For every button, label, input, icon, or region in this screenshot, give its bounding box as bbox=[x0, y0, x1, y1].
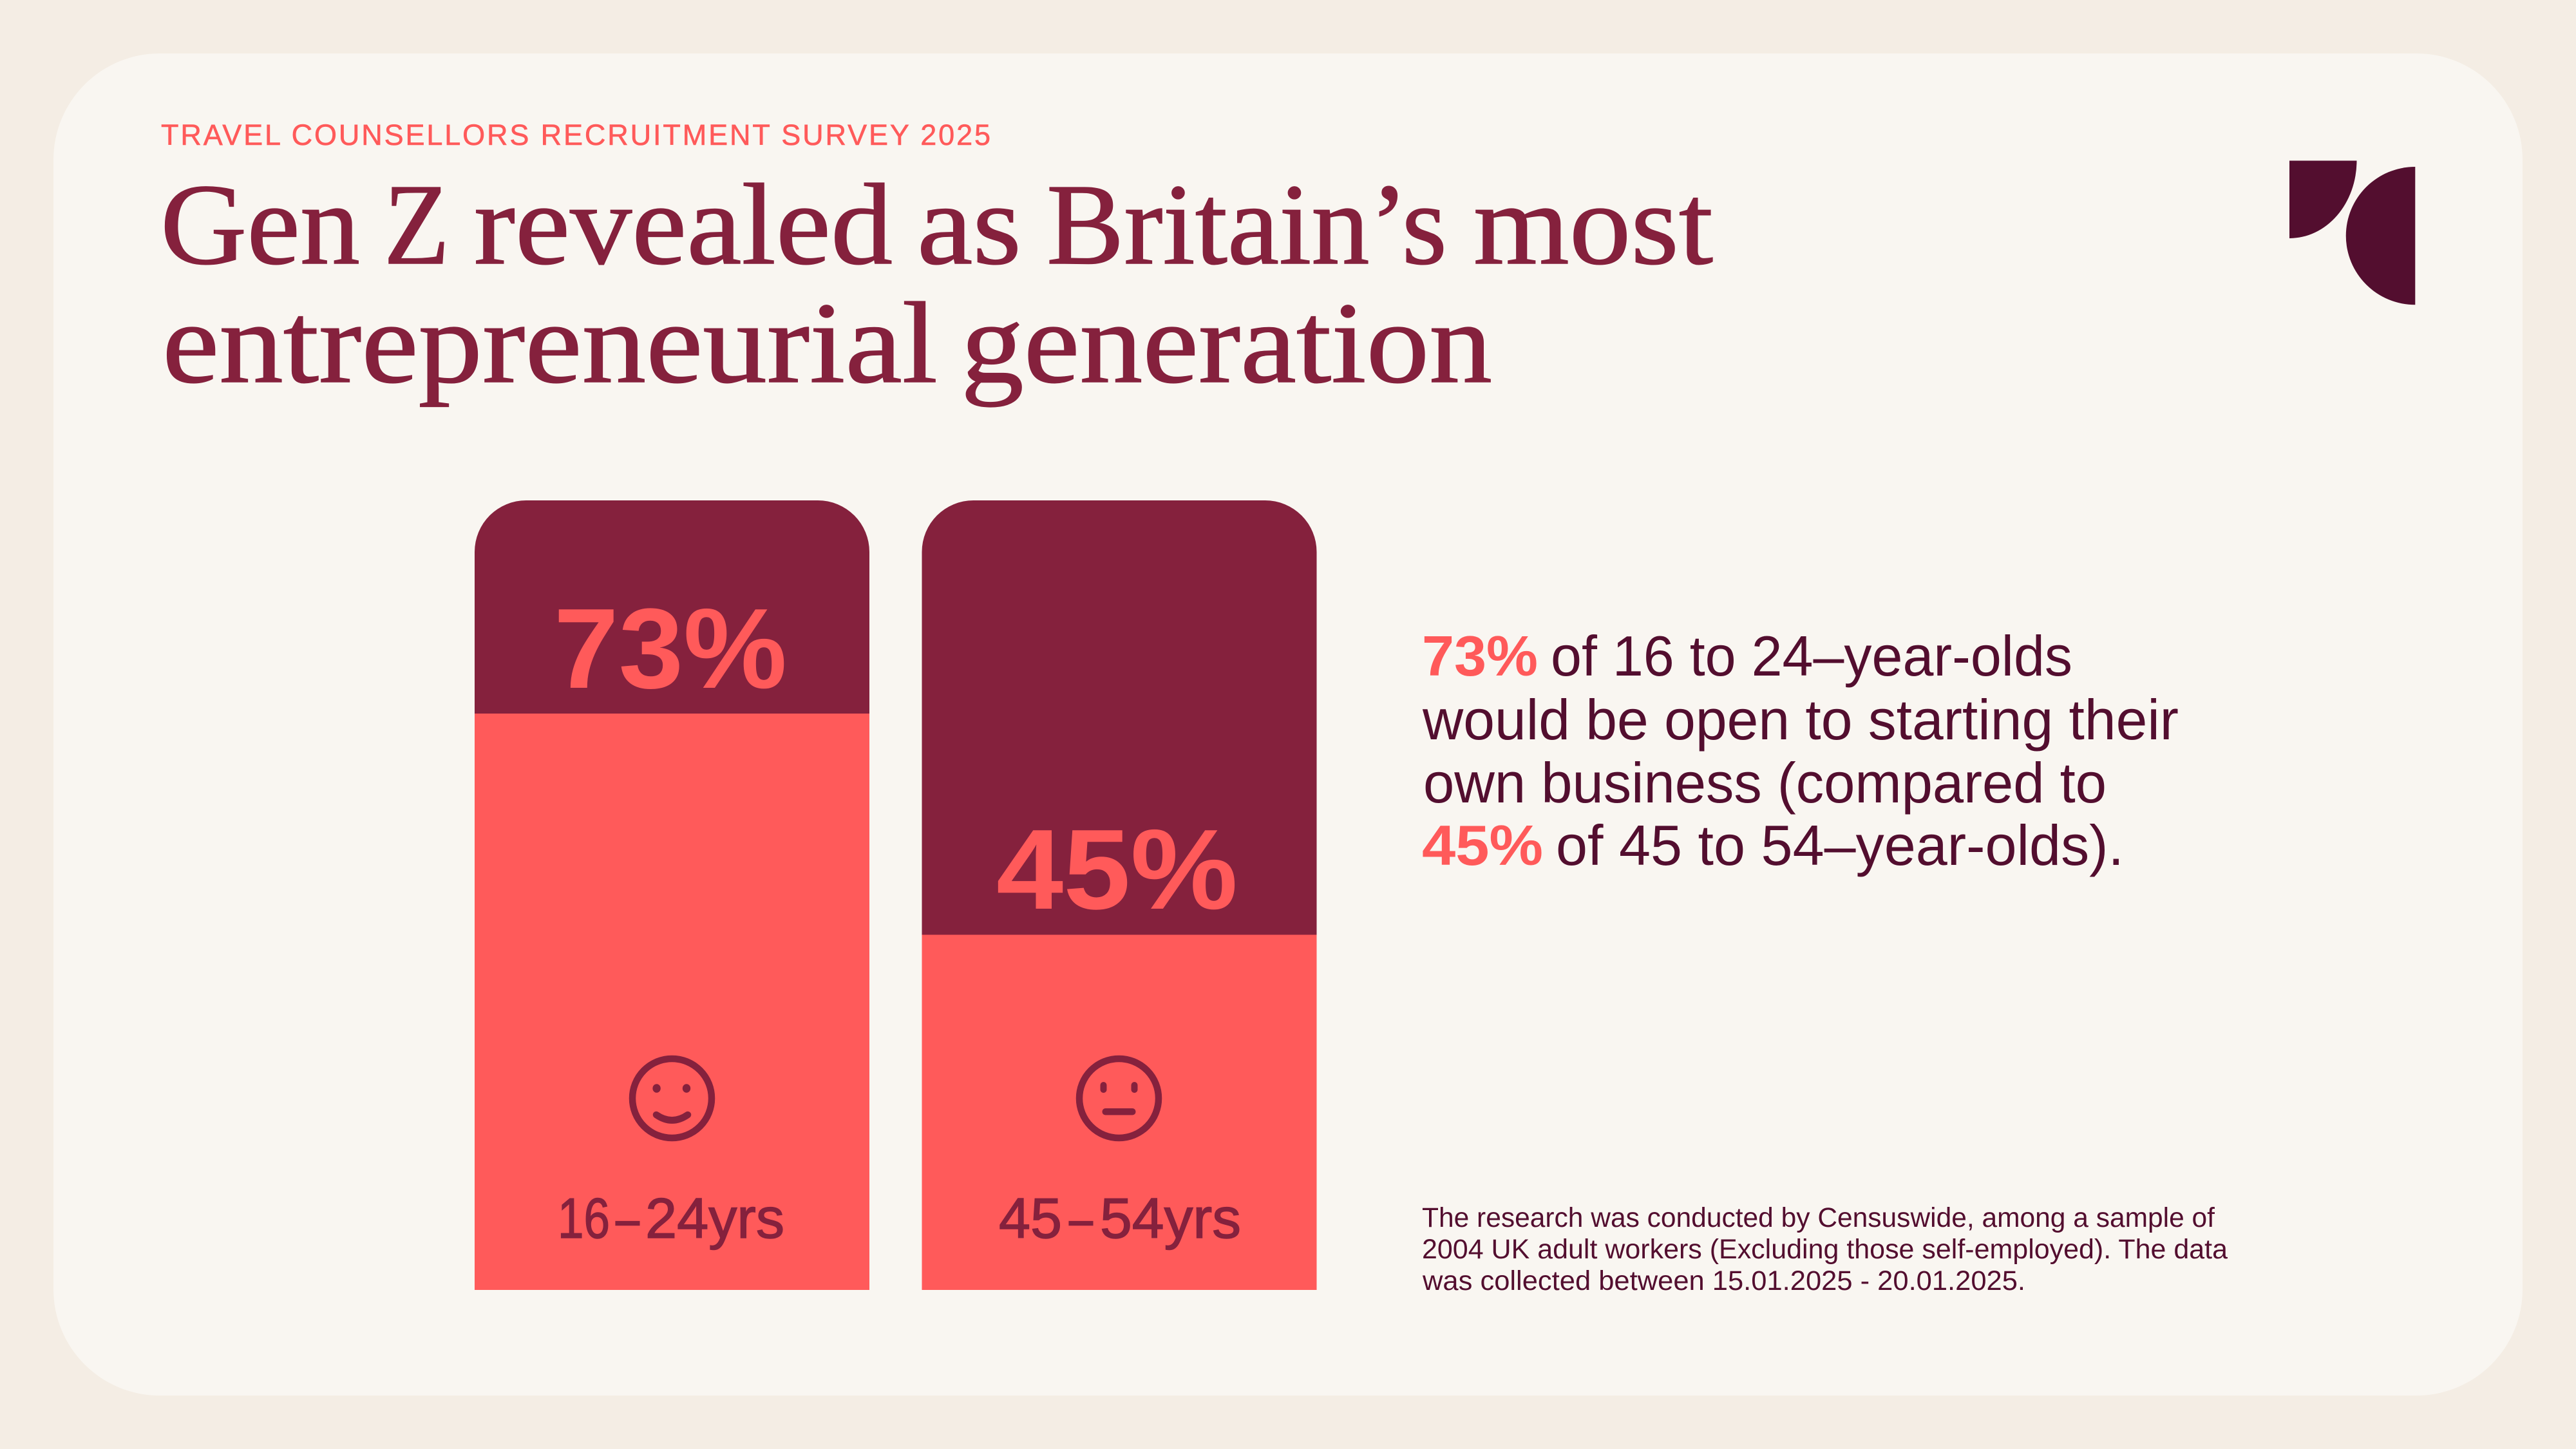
title: entrepreneurial bbox=[162, 279, 938, 407]
title: generation bbox=[961, 279, 1492, 407]
title: as bbox=[917, 160, 1021, 289]
text block: key finding: 73% bbox=[1422, 624, 1538, 688]
text block: key finding: 45% bbox=[1422, 813, 1543, 877]
bar chart: 16-24yrs bbox=[475, 500, 869, 1290]
eyebrow heading: TRAVEL COUNSELLORS RECRUITMENT SURVEY 2025 bbox=[161, 118, 990, 151]
icon: smiling face bbox=[632, 1059, 712, 1138]
text block: key finding: of 45 to 54–year-olds). bbox=[1556, 813, 2124, 877]
label: 45-54yrs: 54yrs bbox=[1100, 1186, 1241, 1250]
bar fill: 45% bbox=[922, 935, 1316, 1290]
text block: key finding: own business (compared to bbox=[1423, 751, 2107, 815]
bar chart: 45-54yrs bbox=[922, 500, 1316, 1290]
value: 45%: 45% bbox=[996, 806, 1238, 933]
title: most bbox=[1473, 160, 1713, 289]
text block: key finding: would be open to starting their bbox=[1422, 688, 2179, 752]
title: Britain’s bbox=[1046, 160, 1447, 289]
bar background: 45-54yrs bbox=[922, 500, 1316, 1290]
text block: research footnote: was collected between 15.01.2025 - 20.01.2025. bbox=[1422, 1265, 2025, 1296]
text block: key finding bbox=[1422, 624, 2179, 877]
label: 16-24yrs: 24yrs bbox=[645, 1186, 784, 1250]
value: 73%: 73% bbox=[554, 585, 787, 712]
text block: key finding: of 16 to 24–year-olds bbox=[1551, 624, 2072, 688]
title bbox=[160, 160, 1713, 407]
bar fill: 73% bbox=[475, 714, 869, 1290]
label: 16-24yrs: – bbox=[616, 1186, 639, 1250]
text block: research footnote: 2004 UK adult workers (Excluding those self-employed). The data bbox=[1422, 1234, 2228, 1265]
icon: brand logo bbox=[2289, 161, 2415, 305]
text block: research footnote bbox=[1422, 1202, 2228, 1296]
title: revealed bbox=[474, 160, 893, 289]
title: Gen bbox=[160, 160, 360, 289]
text block: research footnote: The research was conducted by Censuswide, among a sample of bbox=[1422, 1202, 2215, 1233]
title: Z bbox=[384, 160, 450, 289]
bar background: 16-24yrs bbox=[475, 500, 869, 1290]
label: 16-24yrs: 16 bbox=[558, 1186, 610, 1250]
icon: neutral face bbox=[1079, 1059, 1159, 1138]
label: 45-54yrs: – bbox=[1069, 1186, 1093, 1250]
label: 45-54yrs: 45 bbox=[999, 1186, 1062, 1250]
